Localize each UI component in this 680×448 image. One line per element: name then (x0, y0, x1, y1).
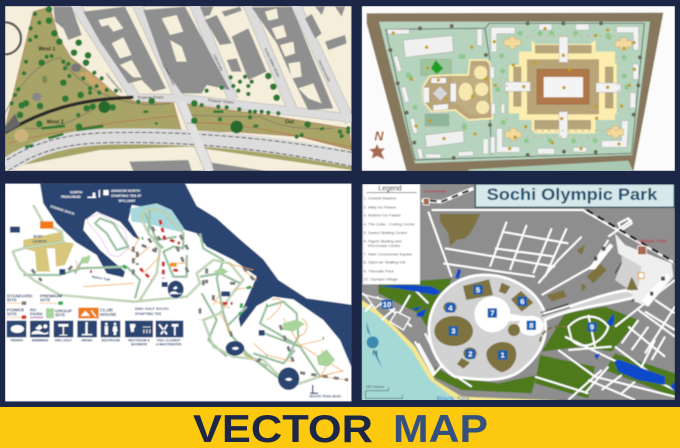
legend captions: SHOWERS (131, 343, 147, 347)
compass rose (367, 322, 382, 368)
panel: Sochi Olympic Park map: 1 (501, 351, 506, 360)
panel: city park map: Cheruskerstraße (105, 72, 124, 94)
site markers (32, 227, 348, 380)
paths (5, 57, 333, 129)
map place labels: Nature Trail (91, 275, 110, 282)
compass (369, 130, 385, 159)
legend: 2. Maly Ice Palace (364, 204, 397, 209)
seating dots (501, 36, 622, 137)
panel: olympic plaza plan (362, 6, 675, 172)
railway tracks (5, 132, 353, 171)
road across tracks (182, 102, 210, 172)
orange spurs (77, 237, 348, 380)
rv park loop (87, 213, 128, 257)
top trailhead labels: NORTH (70, 190, 83, 194)
bottom yellow banner (0, 407, 680, 448)
parking signs (587, 243, 613, 269)
Olympic village blocks (365, 295, 410, 330)
trees (20, 9, 308, 127)
legend (363, 184, 420, 284)
legend text: HOUSE (100, 312, 117, 317)
legend text (7, 293, 169, 318)
legend icon glyphs (11, 322, 178, 336)
roads (74, 3, 353, 172)
legend text: SITE (40, 298, 50, 303)
fence (386, 23, 644, 160)
legend: 1. Central Stadium (364, 196, 397, 201)
title box (475, 184, 674, 207)
buildings (53, 7, 347, 171)
legend: 10. Olympic Village (364, 277, 398, 282)
sea and beach (362, 300, 588, 402)
compass: N (374, 130, 384, 144)
road edges (74, 3, 353, 172)
legend text: STARTING TEE (135, 312, 162, 316)
legend captions (10, 338, 182, 347)
panel: Sochi Olympic Park map: 6 (520, 297, 524, 306)
venue plazas (474, 296, 510, 332)
panel: Sochi Olympic Park map: 9 (590, 323, 594, 332)
round plaza ring (0, 22, 21, 54)
panel: Sochi Olympic Park map: Imeretinskaya (424, 189, 447, 193)
fishing dock (57, 213, 65, 222)
brown perimeter (367, 13, 663, 172)
panel: Sochi Olympic Park map: 4 (448, 303, 453, 312)
venues (434, 214, 607, 372)
pond symbols (170, 286, 292, 381)
legend text: CLUB (100, 307, 114, 312)
fish and swim ponds (168, 281, 184, 298)
map labels: Ost (285, 120, 294, 126)
number markers (393, 29, 634, 149)
sea label: Black Sea (437, 394, 471, 403)
panel: city park map (0, 3, 353, 172)
railway line dashes (587, 210, 675, 263)
panel: Sochi Olympic Park map: 8 (529, 321, 534, 330)
west complex (403, 36, 492, 147)
legend text: PARK (30, 312, 43, 317)
parks (378, 278, 675, 398)
road network (362, 209, 675, 400)
legend text: GROUP (55, 308, 72, 313)
panel: city park map: Naumannstraße (317, 59, 331, 83)
legend text: SITE (55, 313, 65, 318)
legend text: RV (30, 307, 37, 312)
railway spur (622, 253, 637, 302)
legend: 4. The Cube - Curling Centre (364, 221, 416, 226)
legend icon tiles (7, 321, 183, 337)
boat launch (23, 232, 74, 272)
top trailhead labels: AMADOR NORTH (111, 189, 141, 193)
legend text: STANDARD (7, 293, 33, 298)
park lawns (5, 7, 182, 166)
legend: 8. Open-air Skating rink (364, 260, 406, 265)
shallow water zone (130, 203, 185, 232)
map place labels: SOUTH TRAILHEAD (309, 394, 342, 398)
central stadium (544, 77, 583, 97)
compass rose: N (372, 349, 378, 358)
panel: Sochi Olympic Park map: 7 (490, 309, 494, 318)
station labels: Olympic Park (637, 238, 667, 244)
legend captions: DISC GOLF (55, 338, 72, 342)
scale bar (366, 387, 402, 399)
courtyards (98, 8, 322, 103)
top trailhead labels (50, 189, 142, 216)
legend text: DISC GOLF SOUTH (135, 307, 169, 311)
lakes (378, 268, 675, 392)
legend text: SITE (7, 298, 17, 303)
legend: Legend (378, 186, 402, 193)
legend: 7. Main Ceremonial Square (364, 251, 413, 256)
legend: 3. Bolshoi Ice Palace (364, 213, 402, 218)
black road section (5, 97, 133, 133)
venue number badges (382, 285, 597, 360)
map labels: West 2 (47, 119, 64, 125)
central complex (505, 37, 621, 138)
legend captions: SWIMMING (32, 338, 49, 342)
scale text: 250 metres (366, 385, 384, 389)
legend text: PREMIUM (40, 293, 62, 298)
panel: Sochi Olympic Park map (362, 184, 675, 403)
panel: city park map: Gotenstraße (164, 68, 176, 86)
legend: 5. Speed Skating Centre (364, 230, 408, 235)
lake water (40, 183, 353, 372)
panel: city park map: Gustav-Müller-Straße (263, 47, 281, 78)
top trailhead labels: TRAILHEAD (61, 195, 81, 199)
gate markers (390, 23, 640, 158)
small navy signs (10, 227, 265, 336)
panel: Sochi Olympic Park map: 2 (468, 350, 472, 359)
green grounds (379, 22, 650, 163)
map place labels (32, 235, 342, 398)
Olympic plaza (429, 275, 638, 380)
top trailhead labels: STARTING TEE AT (111, 194, 142, 198)
legend captions: & WASTEWATER (156, 343, 182, 347)
map place labels: BOAT (33, 235, 43, 239)
station white area (615, 233, 673, 307)
legend captions: RESTROOM (102, 338, 120, 342)
panel: city park map: Leberstraße (212, 54, 224, 72)
legend swatches (7, 303, 58, 317)
panel: campground trail map (5, 183, 353, 402)
map labels (38, 47, 294, 126)
legend: 9. Thematic Park (364, 268, 394, 273)
ponds and plazas (5, 63, 110, 142)
panel: Sochi Olympic Park map: 5 (476, 285, 481, 294)
station icons (423, 198, 646, 255)
top trailhead labels: FISHING DOCK (50, 204, 76, 216)
map labels: West 1 (38, 47, 55, 53)
panel: city park map: Torgauer Straße (137, 95, 164, 99)
map place labels: LAUNCH (32, 240, 47, 244)
legend captions: HIKING (81, 338, 93, 342)
clubhouse tag (170, 263, 177, 267)
shrubs (408, 33, 627, 141)
panel: city park map: Torgauer Straße (207, 98, 234, 105)
panel: Sochi Olympic Park map: 3 (451, 327, 455, 336)
white pavilions (387, 24, 639, 159)
legend text: SITE (7, 312, 17, 317)
legend text: POWER (7, 307, 25, 312)
ornamental gardens (504, 37, 632, 140)
legend: 6. Figure Skating and (364, 238, 402, 243)
top trailhead labels: SPILLWAY (118, 199, 136, 203)
group site lawns (81, 255, 335, 367)
trails (13, 205, 320, 387)
title box: Sochi Olympic Park (487, 185, 658, 204)
legend: Short-track Centre (368, 243, 401, 248)
clubhouse marker (40, 221, 53, 229)
legend captions: FISHING (10, 338, 24, 342)
panel: Sochi Olympic Park map: 10 (383, 300, 391, 309)
legend captions: FISH CLEANUP (157, 338, 180, 342)
legend captions: RESTROOM & (128, 338, 150, 342)
